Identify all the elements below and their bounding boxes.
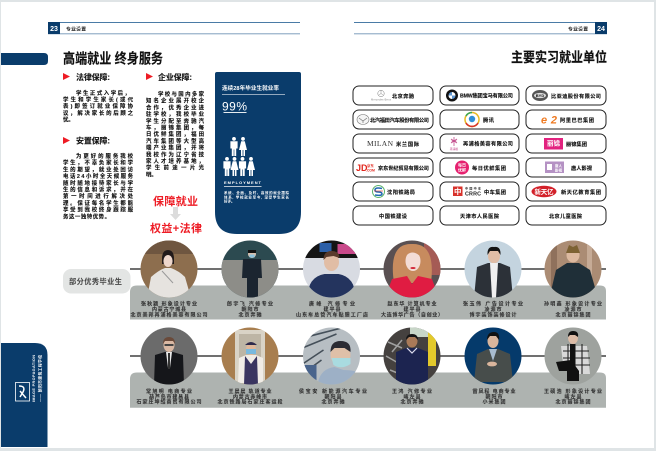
left page header: 23 <box>50 26 58 33</box>
card: Missfresh <box>440 158 519 177</box>
graduate captions: row 1 <box>130 300 602 319</box>
text block: placement guarantee: 安置保障: <box>76 136 110 146</box>
right page header <box>354 22 607 34</box>
text block: enterprise guarantee <box>146 72 205 178</box>
text block: enterprise guarantee: 知名企业展开校企 <box>146 97 205 105</box>
graduate captions: row 2: 北京丽锦集团 <box>556 399 590 406</box>
photo: Zhang Qiuying <box>140 240 198 298</box>
graduate captions: row 2: 常旭明 电商专业 <box>146 388 192 395</box>
panel: employment rate: EMPLOYMENT <box>224 180 262 185</box>
graduate captions: row 2: 侯宝安 新能源汽车专业 <box>299 388 367 395</box>
panel: employment rate <box>215 72 301 234</box>
card: CRRC: 中国中车 <box>465 186 481 190</box>
text block: enterprise guarantee: 我校作为辽宁省技 <box>146 150 205 158</box>
graduate captions: row 2: 北京奔驰 <box>322 399 344 406</box>
left page header: 专业设置 <box>66 25 86 32</box>
card: CRRC: 中 <box>454 186 461 196</box>
text block: enterprise guarantee: 学生前途一片光 <box>146 164 205 172</box>
card: Lijin group <box>526 134 606 153</box>
card: JD: .COM <box>366 168 375 172</box>
graduate captions: row 1: 北京奔驰 <box>238 312 262 319</box>
graduate captions: row 2: 朝阳县 <box>324 393 342 400</box>
graduate captions: row 1: 建平县 <box>404 306 420 313</box>
graduate captions: row 2: 王鸿 汽修专业 <box>392 388 432 395</box>
icon: people <box>223 137 255 176</box>
graduate captions: row 1: 大连博华广告（自创业） <box>381 312 443 319</box>
graduate captions: row 2: 雷凤程 电商专业 <box>472 388 516 395</box>
text block: placement guarantee: 理。保证每名学生都能 <box>63 199 134 207</box>
photo: Zhang Yuwei <box>464 240 522 298</box>
card: Alibaba <box>526 110 606 129</box>
photo: Lei Fengcheng <box>464 327 522 385</box>
panel: employment rate: 系统、全面、及时、高效的就业跟踪 <box>224 190 290 195</box>
text block: enterprise guarantee: 学校与国内多家 <box>158 90 205 98</box>
card: Tencent: 腾讯 <box>483 116 495 124</box>
card: Tangren media: 影视 <box>555 168 562 172</box>
card: Tianjin People's Hospital <box>440 206 519 225</box>
text block: enterprise guarantee: 汽车集团等大型高 <box>146 137 205 145</box>
card: Tencent <box>440 110 519 129</box>
graduate captions: row 1: 张玉伟 广告设计专业 <box>463 300 523 308</box>
card: Tangren media: 唐人影视 <box>571 164 593 172</box>
card: Alibaba: e2 <box>541 114 557 126</box>
left page header <box>48 22 300 34</box>
text block: legal guarantee: 学生正式入学后， <box>76 89 130 97</box>
text block: placement guarantee: 为更好的服务我校 <box>76 152 134 160</box>
title: left page: 高端就业 终身服务 <box>63 50 163 66</box>
red slogan with arrow: 权益+法律 <box>150 221 202 235</box>
graduates band: row 2 <box>130 355 606 408</box>
panel: company logo grid <box>353 86 606 225</box>
card: JD <box>353 158 433 177</box>
text block: enterprise guarantee: 车，丽锦集团，每 <box>146 124 205 132</box>
card: BYD <box>526 86 606 105</box>
left navy footer tab <box>1 343 48 447</box>
card: Missfresh: 每日优鲜集团 <box>472 164 506 172</box>
text block: placement guarantee: 学生，不辜负家长和学 <box>63 159 134 167</box>
card: JD: 京东世纪贸易有限公司 <box>378 164 429 172</box>
text block: enterprise guarantee: 明。 <box>146 171 157 178</box>
graduate captions: row 1: 内蒙古宁城县 <box>152 306 186 313</box>
left navy footer tab: IMAGE PROPAGATION <box>32 355 36 402</box>
card: BAIC Foton <box>353 110 433 129</box>
text block: legal guarantee <box>63 72 134 123</box>
text block: placement guarantee: 随时随地接待家长与学 <box>63 179 134 187</box>
card: Lijin group: 丽锦 <box>547 138 560 148</box>
card: Lijin group: 丽锦集团 <box>566 140 587 148</box>
panel: employment rate: 连续28年毕业生就业率 <box>222 84 279 92</box>
card: JD: 京东 <box>367 163 374 168</box>
card: Beijing Benz <box>353 86 433 105</box>
card: Milan: MILAN <box>367 139 394 148</box>
card: BMW: BMW集团宝马有限公司 <box>460 91 513 99</box>
card: China Railway Construction: 中国铁建设 <box>379 212 408 220</box>
graduate captions: row 1: 北京美邦再浦格美容有限公司 <box>130 312 208 319</box>
text block: legal guarantee: 忧。 <box>63 115 74 123</box>
left navy tab <box>1 53 48 65</box>
graduate captions: row 2: 葫芦岛市建昌县 <box>149 393 189 400</box>
card: Tangren media: 唐人 <box>555 163 562 168</box>
text block: enterprise guarantee: 合作，优秀企业进 <box>146 103 205 111</box>
graduate captions: row 1: 唐峰 汽修专业 <box>309 300 355 308</box>
card: Shenyang Railway <box>353 182 433 201</box>
graduate captions: row 1: 建平县 <box>324 306 340 313</box>
panel: employment rate: 体系, 学校就业至今, 深受学生家长 <box>224 194 290 199</box>
graduate captions: row 2: 北京铁路局石家庄客运段 <box>218 399 282 406</box>
card: BMW <box>440 86 519 105</box>
card: Tangren media <box>526 158 606 177</box>
graduate captions: row 1: 凌源市 <box>564 306 582 313</box>
text block: enterprise guarantee: 驻学校，我校毕业 <box>146 110 205 118</box>
graduate captions: row 2: 喀左县 <box>404 393 420 400</box>
text block: placement guarantee: 电话24小时全天候服务 <box>63 172 134 180</box>
graduate captions: row 2: 石家庄坤绍商贸有限公司 <box>136 399 202 406</box>
graduates label: 部分优秀毕业生 <box>69 277 122 286</box>
card: Tianjin People's Hospital: 天津市人民医院 <box>460 212 500 220</box>
text block: legal guarantee: 议，解决家长的后顾之 <box>63 109 134 117</box>
card: Xintianyi education <box>526 182 606 201</box>
card: Zaipuge beauty: 再浦格 <box>450 147 458 151</box>
photo: Sun Mingxin <box>544 240 602 298</box>
card: Alibaba: 阿里巴巴集团 <box>560 116 594 124</box>
card: Milan <box>353 134 433 153</box>
text block: legal guarantee: 法律保障: <box>76 72 110 82</box>
text block: legal guarantee: 表)即签订就业保障协 <box>63 102 134 110</box>
text block: placement guarantee: 享受到我校终身跟踪服 <box>63 206 134 214</box>
card: Shenyang Railway: 沈阳铁路局 <box>387 188 415 196</box>
graduate captions: row 1: 孙明鑫 形象设计专业 <box>544 300 602 308</box>
card: JD: JD <box>356 163 368 173</box>
card: BAIC Foton: 北汽福田汽车股份有限公司 <box>370 116 429 124</box>
card: Zaipuge beauty: 再浦格美容有限公司 <box>463 139 513 147</box>
text block: placement guarantee: 第一时间进行解决处 <box>63 192 134 200</box>
photo: Wang Hong <box>383 327 441 385</box>
card: Zaipuge beauty <box>440 134 519 153</box>
card: Missfresh: 优鲜 <box>458 166 466 172</box>
graduate captions: row 2: 北京奔驰 <box>400 399 424 406</box>
photo: Tang Feng <box>302 240 360 298</box>
title: right page: 主要实习就业单位 <box>511 49 607 65</box>
card: Xintianyi education: 新天亿教育集团 <box>561 188 601 196</box>
graduate captions: row 1: 博宇装饰装修设计 <box>470 312 516 319</box>
graduate captions: row 2: 王硕浩 形象设计专业 <box>544 388 602 395</box>
card: CRRC: 中车集团 <box>484 188 506 196</box>
card: Beijing Children's Hospital: 北京儿童医院 <box>549 212 583 220</box>
graduate captions: row 1: 张秋颖 形象设计专业 <box>141 300 197 308</box>
text block: legal guarantee: 学生和学生家长(或代 <box>63 96 134 104</box>
photo: Lang Yufei <box>221 240 279 298</box>
card: Missfresh: 每日 <box>458 162 466 168</box>
text block: placement guarantee: 生的期望，就业处回访 <box>63 165 134 173</box>
icon: school logo <box>16 382 30 401</box>
panel: employment rate: 好评。 <box>224 199 234 204</box>
graduate captions: row 2: 内蒙古赤峰市 <box>233 393 267 400</box>
graduate captions: row 1: 凌源市 <box>484 306 502 313</box>
panel: employment rate: 99% <box>222 100 247 114</box>
graduate captions: row 1: 朝阳市 <box>242 306 258 313</box>
red slogan with arrow <box>150 194 202 235</box>
card: Beijing Benz: Mercedes-Benz <box>371 98 392 102</box>
graduates band: row 1 <box>130 268 606 320</box>
right page header: 专业设置 <box>568 25 588 32</box>
right page header: 24 <box>597 26 605 33</box>
card: Xintianyi education: 新天亿 <box>534 187 554 196</box>
text block: placement guarantee: 务这一独特优势。 <box>63 212 110 220</box>
graduate captions: row 2: 朝阳市 <box>486 393 502 400</box>
graduate captions: row 1: 郎宇飞 汽修专业 <box>227 300 273 308</box>
text block: placement guarantee <box>63 136 134 220</box>
text block: enterprise guarantee: 企业保障: <box>158 72 192 82</box>
graduate captions: row 2: 喀左县 <box>564 393 582 400</box>
graduate captions: row 1: 赵东华 计算机专业 <box>388 300 436 308</box>
graduate captions: row 2 <box>136 388 602 406</box>
card: Milan: 米兰国际 <box>396 140 420 148</box>
text block: placement guarantee: 生的信息和诉求，并在 <box>63 186 134 194</box>
graduate captions: row 1: 山东车总管汽车贴膜工厂店 <box>296 312 368 319</box>
text block: enterprise guarantee: 日优鲜集团，福田 <box>146 130 204 138</box>
photo: Wang Shuohao <box>544 327 602 385</box>
card: CRRC <box>440 182 519 201</box>
photo: Zhao Donghua <box>383 240 441 298</box>
graduate captions: row 2: 小米集团 <box>482 399 506 406</box>
card: BYD: BYD <box>536 93 544 98</box>
photo: Hou Bao'an <box>302 327 360 385</box>
card: Beijing Benz: 北京奔驰 <box>392 92 415 100</box>
red slogan with arrow: 保障就业 <box>153 194 198 208</box>
text block: enterprise guarantee: 学生分配至奔驰汽 <box>146 117 205 125</box>
photo: Chang Xuming <box>140 327 198 385</box>
graduate captions: row 2: 王晨晨 轨道专业 <box>228 388 272 395</box>
card: China Railway Construction <box>353 206 433 225</box>
text block: enterprise guarantee: 端产业集团，并将 <box>146 144 205 152</box>
graduate captions: row 1: 北京丽锦集团 <box>556 312 590 319</box>
card: BYD: 比亚迪股份有限公司 <box>551 92 601 100</box>
text block: enterprise guarantee: 家人才培养基地， <box>146 157 204 165</box>
card: Beijing Children's Hospital <box>526 206 606 225</box>
photo: Wang Chenchen <box>221 327 279 385</box>
left navy footer tab: —— 朝阳市建筑工程学校 <box>38 355 42 402</box>
graduates label <box>63 269 130 294</box>
card: CRRC: CRRC <box>465 192 481 198</box>
